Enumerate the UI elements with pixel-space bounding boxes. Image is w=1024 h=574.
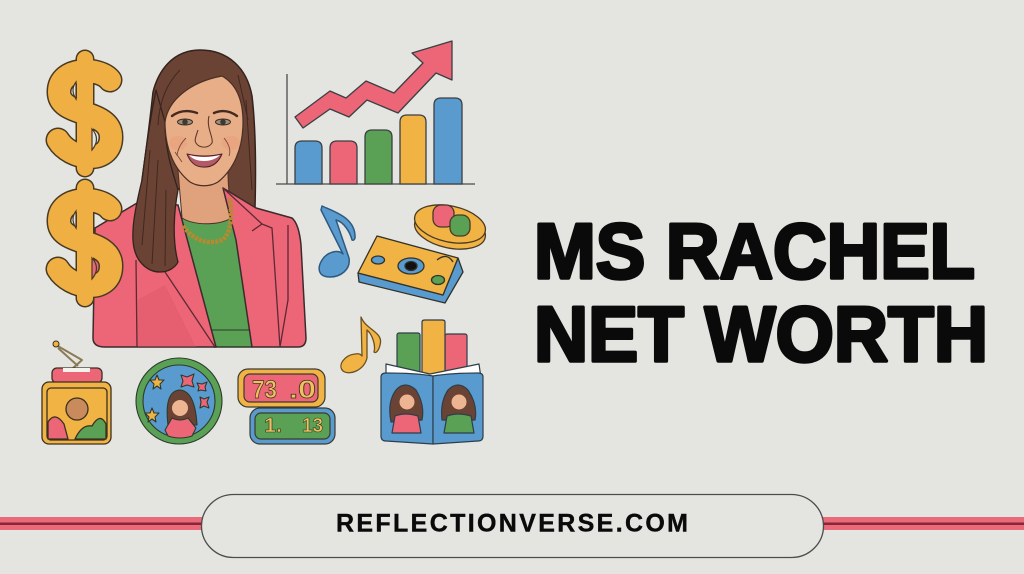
bar chart with rising arrow <box>276 41 475 184</box>
green tag <box>250 408 335 444</box>
back hair <box>142 50 256 208</box>
icon: red and green score tags <box>238 369 335 444</box>
icon: open book with kids <box>381 320 483 444</box>
eyebrows <box>172 111 237 116</box>
icon: red and green score tags: 1. <box>264 415 282 437</box>
title: MS RACHEL NET WORTH: MS RACHEL <box>534 207 975 295</box>
icon: yellow toy device <box>358 236 463 303</box>
hair strands <box>158 70 252 190</box>
footer pill with website <box>202 494 824 558</box>
icon: red and green score tags: 13 <box>302 415 323 437</box>
face <box>165 76 243 186</box>
cheek lines <box>175 138 230 162</box>
icon: picture jar <box>42 341 111 444</box>
nose <box>195 116 212 147</box>
eyes <box>178 119 192 125</box>
icon: plate with toys <box>411 199 489 255</box>
neck <box>178 170 234 224</box>
front hair <box>133 90 178 272</box>
portrait: woman in pink blazer <box>93 50 306 347</box>
blazer lapels <box>136 188 288 347</box>
title: MS RACHEL NET WORTH: NET WORTH <box>534 290 988 378</box>
icon: red and green score tags: .0 <box>289 376 316 404</box>
gold necklace <box>183 198 231 242</box>
icon: yellow music note <box>341 317 381 373</box>
bars <box>295 141 322 184</box>
red tag <box>238 369 325 407</box>
icon: blue music note <box>319 206 355 277</box>
cheeks <box>169 136 187 150</box>
rising arrow <box>295 41 452 128</box>
smile <box>187 154 222 167</box>
title: MS RACHEL NET WORTH <box>534 207 988 378</box>
green top <box>180 214 252 347</box>
pink blazer <box>93 188 306 347</box>
footer pill with website: REFLECTIONVERSE.COM <box>336 510 688 538</box>
icon: round portrait badge with stars <box>136 358 222 444</box>
axes <box>276 74 475 184</box>
icon: top dollar sign <box>58 59 111 168</box>
icon: red and green score tags: 73 <box>252 376 277 404</box>
footer stripes <box>0 517 1024 530</box>
icon: bottom dollar sign <box>58 188 111 298</box>
